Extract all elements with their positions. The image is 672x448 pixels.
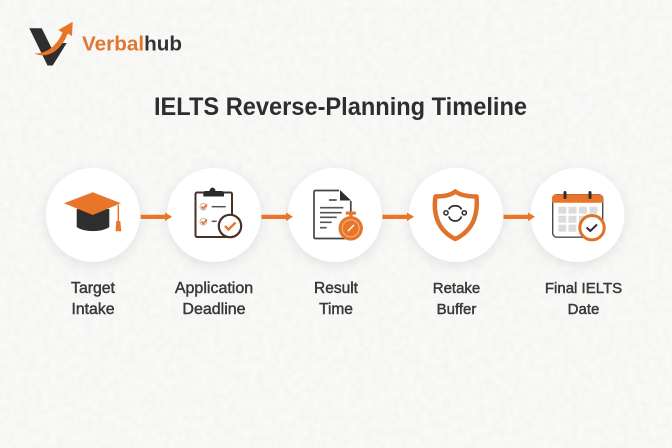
arrow 4 [504,212,535,221]
title: IELTS Reverse-Planning Timeline [154,93,527,121]
logo wordmark: Verbalhub [82,32,182,55]
label: Buffer [437,301,476,318]
arrow 3 [382,212,414,221]
circle [409,168,503,262]
step 3: result time [288,168,382,318]
circle [530,168,624,262]
circle [167,168,261,262]
label: Result [314,280,359,297]
icon: calendar [552,191,604,240]
step 1: target intake [46,168,140,318]
label: Time [319,301,353,318]
logo [29,22,182,66]
arrow 1 [141,212,172,221]
label: Final IELTS [545,280,622,297]
step 4: retake buffer [409,168,503,318]
label: Date [568,301,599,318]
circle [46,168,140,262]
logo mark [29,22,73,66]
arrow 2 [262,212,293,221]
icon: document with stopwatch [314,190,363,240]
step 5: final IELTS date [530,168,624,318]
label: Retake [433,280,480,297]
icon: shield [435,192,477,239]
icon: clipboard [196,188,241,237]
step 2: application deadline [167,168,261,318]
label: Deadline [182,301,246,318]
label: Intake [71,301,115,318]
icon: graduation cap [64,192,121,231]
circle [288,168,382,262]
label: Target [71,280,116,297]
label: Application [175,280,253,297]
